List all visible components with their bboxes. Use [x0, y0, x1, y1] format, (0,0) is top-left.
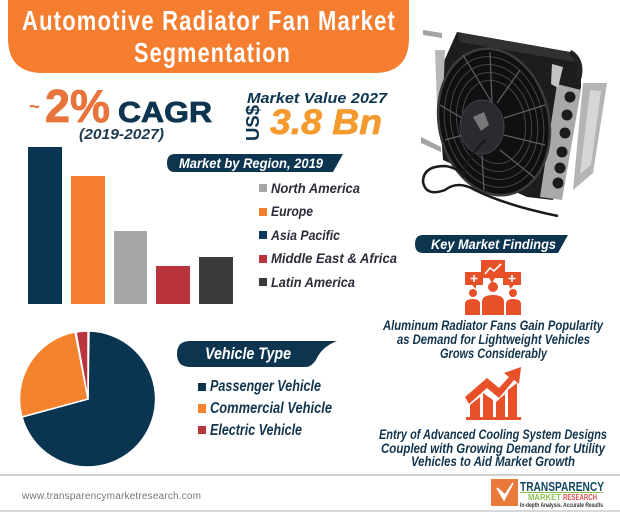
heading: vehicle type [177, 341, 337, 367]
legend: regions: North America [271, 180, 360, 196]
text: finding 1 [382, 318, 604, 361]
legend: vehicle types: Commercial Vehicle [210, 400, 332, 417]
legend: regions: Latin America [271, 274, 355, 290]
CAGR stat: 2% [45, 80, 110, 132]
heading: vehicle type: Vehicle Type [205, 344, 291, 363]
legend: regions: Middle East & Africa [271, 250, 397, 266]
legend: regions [259, 180, 397, 290]
logo: Transparency Market Research: MARKET [528, 493, 561, 502]
icon: team with growth chart [465, 260, 521, 315]
CAGR stat: CAGR [118, 97, 212, 129]
title banner [8, 0, 409, 73]
CAGR stat: ~ [29, 96, 40, 118]
radiator fan product image [421, 30, 607, 216]
text: finding 1: Grows Considerably [440, 346, 548, 361]
footer website: www.transparencymarketresearch.com [21, 491, 201, 502]
market value stat: Market Value 2027 [247, 90, 388, 107]
title banner: Segmentation [134, 37, 291, 68]
heading: key market findings: Key Market Findings [431, 236, 556, 252]
legend: vehicle types: Passenger Vehicle [210, 378, 321, 395]
market value stat [243, 90, 388, 142]
bar chart: market by region [28, 147, 233, 304]
title banner: Automotive Radiator Fan Market [22, 5, 396, 36]
legend: vehicle types [198, 378, 332, 439]
market value stat: 3.8 Bn [270, 103, 382, 142]
legend: regions: Asia Pacific [270, 227, 340, 243]
legend: regions: Europe [271, 203, 313, 219]
pie chart: vehicle type [20, 331, 156, 467]
market value stat: US$ [243, 105, 263, 141]
CAGR stat [29, 80, 212, 143]
legend: vehicle types: Electric Vehicle [210, 422, 302, 439]
heading: market by region: Market by Region, 2019 [179, 155, 323, 171]
CAGR stat: (2019-2027) [79, 126, 164, 143]
text: finding 2: Vehicles to Aid Market Growth [411, 454, 575, 469]
icon: rising bar chart [465, 367, 521, 420]
logo: Transparency Market Research [491, 479, 604, 509]
text: finding 2 [379, 427, 607, 469]
logo: Transparency Market Research: RESEARCH [563, 493, 597, 502]
